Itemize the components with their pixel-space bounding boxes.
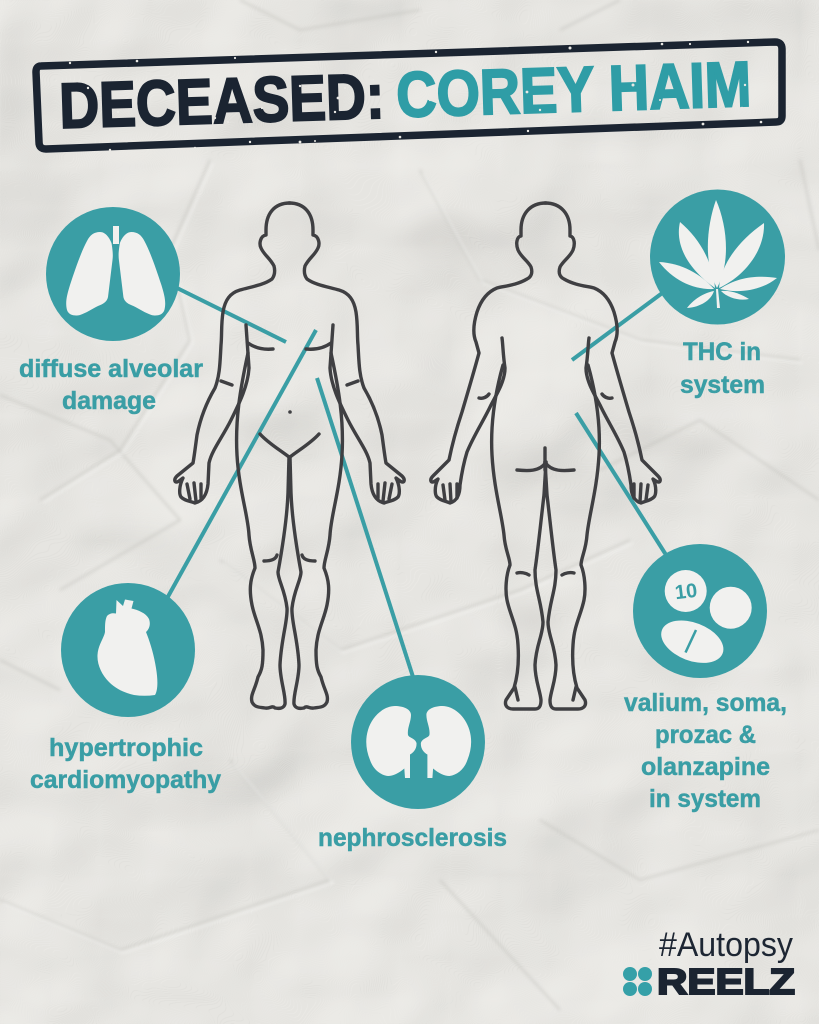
right half front bbox=[289, 203, 404, 708]
line: leaf bbox=[572, 291, 665, 360]
label: drugs in system: in system bbox=[649, 785, 761, 813]
title text: deceased: DECEASED: bbox=[58, 60, 385, 142]
line: heart bbox=[165, 330, 316, 602]
logo wordmark: REELZ bbox=[657, 961, 795, 1002]
title text: corey haim: COREY HAIM bbox=[395, 48, 752, 131]
circle bbox=[633, 544, 767, 678]
left half back bbox=[431, 203, 546, 709]
line: pills bbox=[576, 413, 668, 558]
left half front bbox=[175, 203, 290, 708]
leader lines bbox=[165, 287, 668, 680]
label: diffuse alveolar damage: diffuse alveolar bbox=[19, 355, 203, 383]
label: THC in system bbox=[680, 338, 765, 399]
icon: round pill bbox=[710, 587, 752, 629]
icon: lungs bbox=[66, 226, 165, 315]
icon: leaf bbox=[659, 200, 777, 308]
panel: pills bbox=[633, 544, 767, 678]
panel: kidneys bbox=[351, 675, 485, 809]
panel: lungs bbox=[46, 207, 180, 341]
circle bbox=[46, 207, 180, 341]
front body figure bbox=[175, 203, 404, 708]
label: THC in system: system bbox=[680, 371, 765, 399]
label: hypertrophic cardiomyopathy bbox=[30, 734, 221, 794]
back body figure bbox=[431, 203, 660, 709]
logo: reelz bbox=[623, 961, 795, 1002]
spine cleft bbox=[543, 448, 547, 470]
navel bbox=[288, 410, 292, 414]
circle bbox=[61, 583, 195, 717]
label: hypertrophic cardiomyopathy: hypertrophic bbox=[49, 734, 203, 762]
label: diffuse alveolar damage: damage bbox=[62, 387, 156, 415]
label: THC in system: THC in bbox=[683, 338, 761, 366]
circle bbox=[650, 190, 785, 324]
icon: kidneys bbox=[366, 706, 471, 778]
line: kidneys bbox=[317, 378, 414, 680]
icon: oval pill bbox=[655, 612, 729, 671]
label: hypertrophic cardiomyopathy: cardiomyopathy bbox=[30, 766, 221, 794]
logo dots bbox=[623, 967, 652, 996]
right half back bbox=[545, 203, 660, 709]
label: drugs in system: valium, soma, bbox=[624, 689, 787, 717]
label: drugs in system bbox=[624, 689, 787, 813]
icon: pill 10: 10 bbox=[674, 580, 699, 604]
title stamp bbox=[36, 41, 782, 151]
icon: heart bbox=[97, 600, 157, 696]
hashtag: #Autopsy bbox=[659, 926, 793, 964]
stamp speckles bbox=[69, 41, 762, 151]
line: lungs bbox=[175, 287, 286, 342]
label: nephrosclerosis: nephrosclerosis bbox=[318, 824, 507, 852]
label: drugs in system: olanzapine bbox=[641, 753, 770, 781]
label: diffuse alveolar damage bbox=[19, 355, 203, 415]
circle bbox=[351, 675, 485, 809]
label: drugs in system: prozac & bbox=[655, 721, 756, 749]
panel: heart bbox=[61, 583, 195, 717]
panel: cannabis bbox=[650, 190, 785, 324]
stamp border bbox=[36, 42, 782, 149]
